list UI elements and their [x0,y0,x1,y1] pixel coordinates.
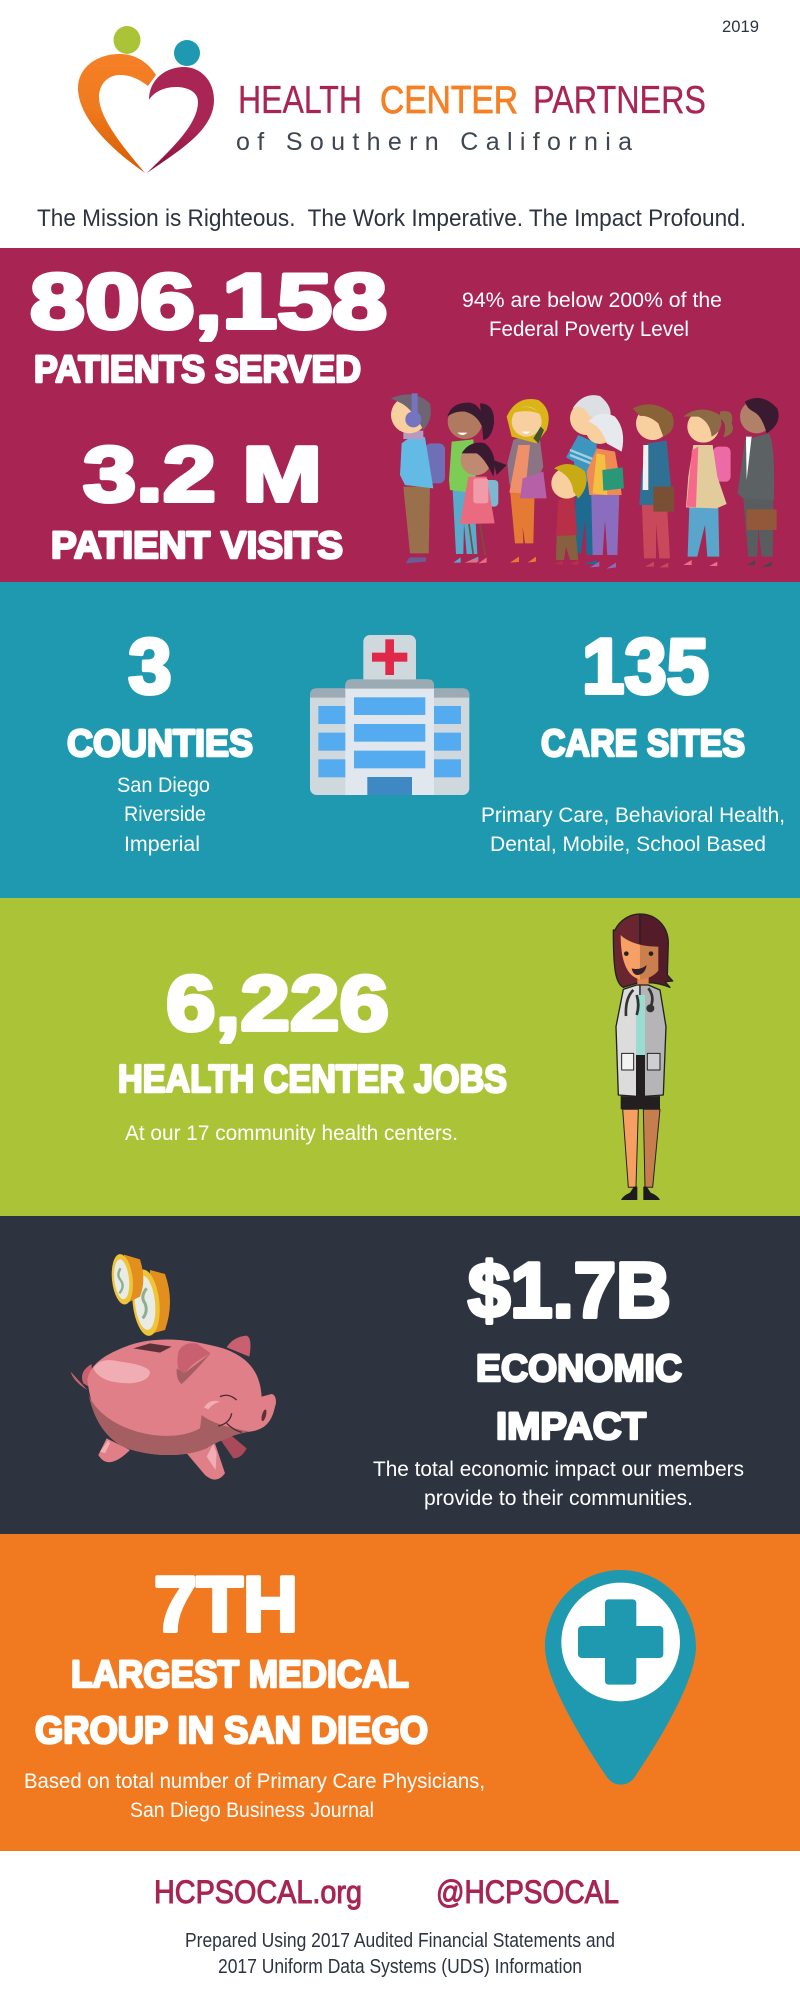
county list: San Diego [117,774,210,797]
pig [71,1336,276,1480]
poverty level note: 94% are below 200% of the [462,289,722,312]
header [0,0,800,248]
care site types [481,804,785,856]
panel: locations [0,582,800,898]
woman with ponytail [447,403,494,563]
poverty level note: Federal Poverty Level [489,318,689,341]
jobs label: HEALTH CENTER JOBS [118,1058,507,1101]
economic impact note: provide to their communities. [424,1487,693,1510]
illustration: doctor [613,914,673,1200]
logo wordmark: PARTNERS [533,79,706,122]
rank label [35,1654,428,1752]
woman with pink backpack [683,410,733,566]
care site types: Dental, Mobile, School Based [490,833,766,856]
panel: patients [0,248,800,582]
source note: Prepared Using 2017 Audited Financial Statements and [185,1930,615,1952]
logo wordmark [236,79,706,156]
man in suit [738,398,779,567]
logo wordmark: CENTER [380,79,518,122]
source note [185,1930,615,1978]
counties label: COUNTIES [67,723,253,765]
woman on phone [507,399,549,563]
man with shoulder bag [633,404,674,567]
year: 2019 [722,17,759,36]
patient visits number: 3.2 M [83,430,322,518]
panel: economic impact [0,1216,800,1534]
economic impact note [373,1458,744,1510]
coins [109,1253,170,1337]
illustration: piggy bank [71,1253,276,1480]
county list [117,774,210,856]
economic impact number: $1.7B [468,1246,671,1334]
girl with backpack [460,443,507,563]
icon: map pin with cross [545,1570,696,1785]
panel: jobs [0,898,800,1216]
economic impact label: IMPACT [496,1406,646,1448]
patients served label: PATIENTS SERVED [34,349,361,391]
rank number: 7TH [154,1560,298,1648]
rank label: GROUP IN SAN DIEGO [35,1710,428,1752]
social handle: @HCPSOCAL [436,1874,619,1910]
economic impact label: ECONOMIC [476,1348,682,1390]
care site types: Primary Care, Behavioral Health, [481,804,785,827]
rank note [24,1770,485,1822]
source note: 2017 Uniform Data Systems (UDS) Information [218,1956,582,1978]
care sites label: CARE SITES [541,723,745,765]
mission statement: The Mission is Righteous. The Work Imperative. The Impact Profound. [37,205,746,232]
economic impact note: The total economic impact our members [373,1458,744,1481]
patient visits label: PATIENT VISITS [51,525,343,567]
county list: Riverside [124,803,206,826]
older man [566,395,611,564]
panel: medical group rank [0,1534,800,1851]
economic impact label [476,1348,682,1448]
boy [551,464,586,565]
county list: Imperial [124,833,200,856]
rank note: Based on total number of Primary Care Physicians, [24,1770,485,1793]
illustration: people in line [391,393,779,569]
rank label: LARGEST MEDICAL [71,1654,409,1696]
website link: HCPSOCAL.org [154,1874,362,1910]
icon: hospital [310,635,469,795]
jobs number: 6,226 [166,959,389,1047]
logo wordmark: HEALTH [238,79,362,122]
patients served number: 806,158 [30,257,387,345]
counties number: 3 [128,622,172,710]
logo wordmark: of Southern California [236,128,632,156]
older woman [586,413,624,569]
rank note: San Diego Business Journal [130,1799,374,1822]
person with headphones [391,393,445,563]
footer [0,1851,800,2000]
logo: heart with two figures [78,26,214,173]
jobs note: At our 17 community health centers. [125,1122,458,1145]
care sites number: 135 [582,622,709,710]
poverty level note [462,289,722,341]
